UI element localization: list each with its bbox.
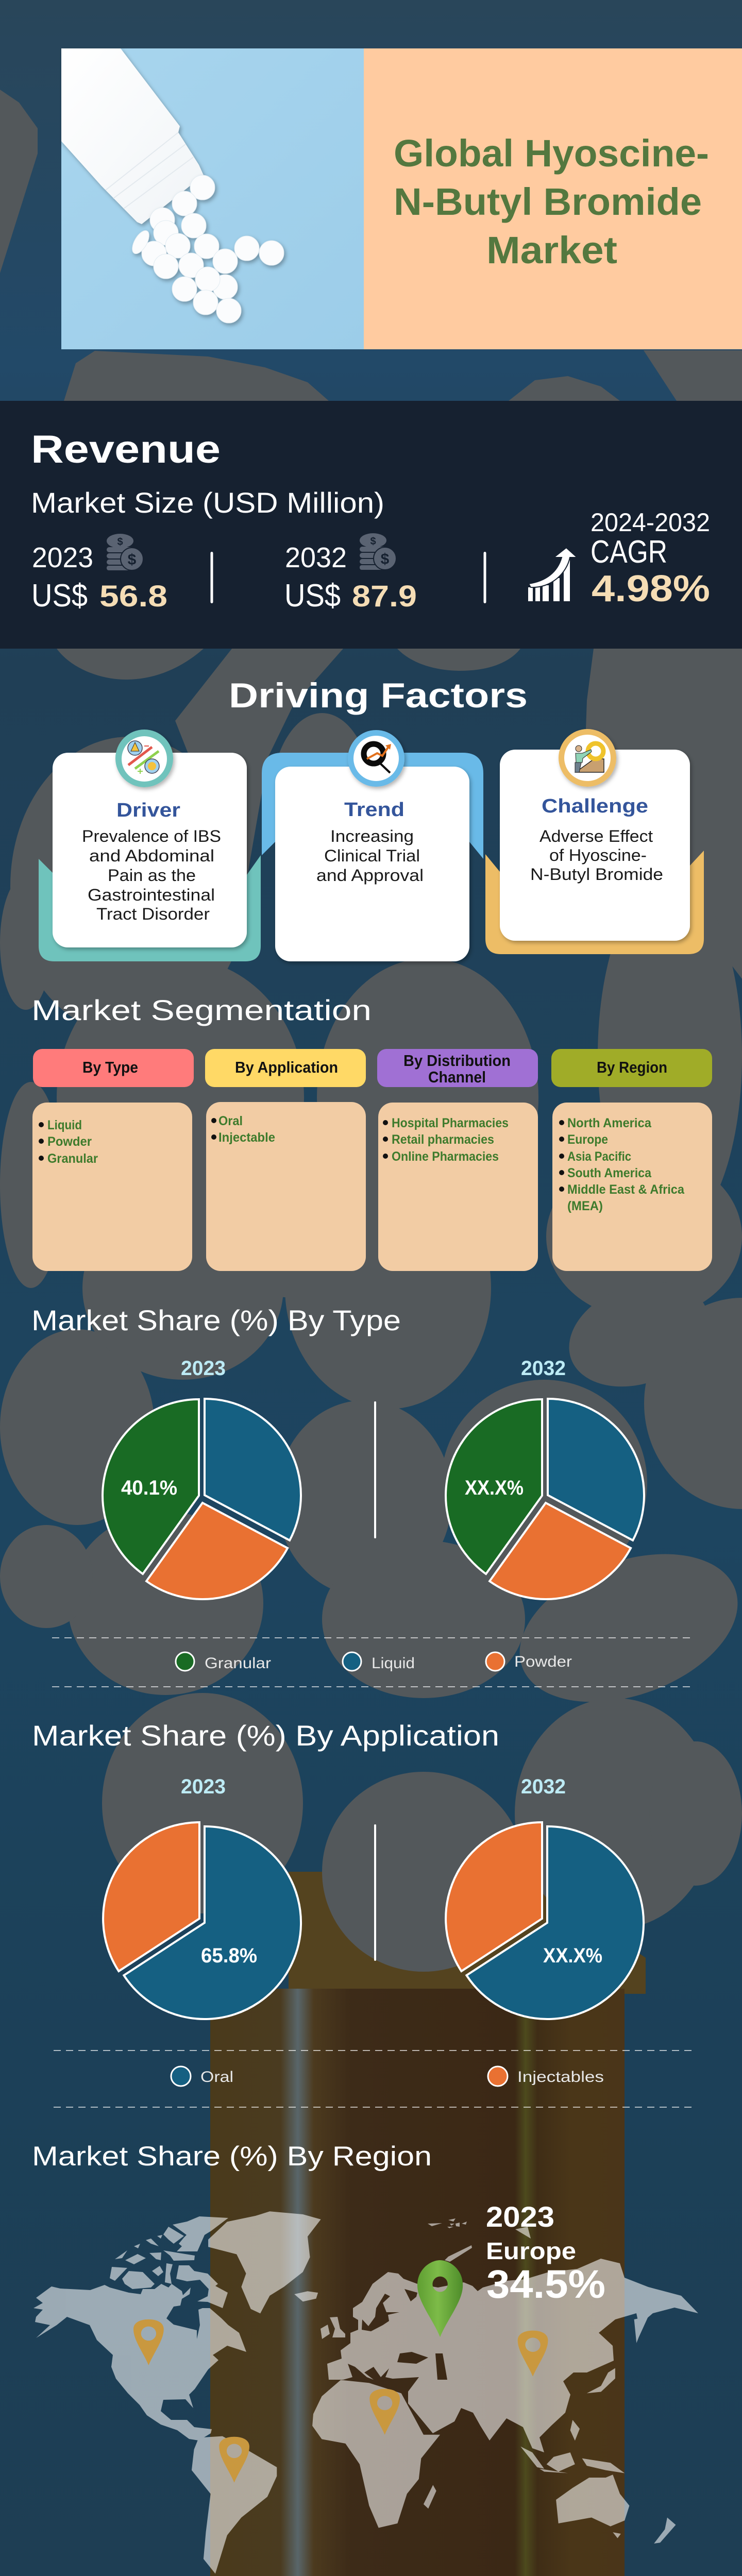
panel: by type bbox=[32, 1049, 194, 1271]
list: region: Europe bbox=[567, 1132, 608, 1147]
challenge heading: Challenge bbox=[542, 795, 648, 817]
icon: coins 2023: $ bbox=[117, 536, 123, 548]
label: 2023: 2023 bbox=[181, 1357, 226, 1380]
great britain and ireland bbox=[321, 2317, 345, 2339]
trend text: Clinical Trial bbox=[324, 846, 420, 865]
value: granular 2023: 40.1% bbox=[121, 1477, 177, 1499]
driver text: Gastrointestinal bbox=[88, 886, 215, 904]
list: type: Powder bbox=[47, 1134, 92, 1149]
pin: north america bbox=[133, 2319, 164, 2365]
legend: type bbox=[176, 1652, 572, 1672]
oceania bbox=[556, 2475, 676, 2544]
pie chart: application 2032 bbox=[446, 1822, 644, 2019]
callout: europe share bbox=[486, 2200, 605, 2307]
driver text: Pain as the bbox=[108, 866, 196, 885]
title panel bbox=[364, 48, 742, 349]
icon: coins 2023: $ bbox=[128, 551, 137, 568]
stat: 2023 revenue: 2023 bbox=[32, 541, 93, 573]
pill bottle bbox=[61, 48, 204, 224]
callout: europe share: 34.5% bbox=[486, 2262, 605, 2307]
stat: 2032 revenue: US$ bbox=[284, 578, 341, 614]
eurasia bbox=[327, 2259, 698, 2452]
map land bbox=[33, 2211, 698, 2574]
icon: driver bbox=[115, 730, 173, 787]
panel: by distribution channel bbox=[377, 1049, 538, 1271]
header: by distribution channel: Channel bbox=[428, 1068, 486, 1086]
list: type: Liquid bbox=[47, 1118, 82, 1132]
header: by application bbox=[205, 1049, 366, 1087]
title bbox=[394, 132, 709, 272]
list: distribution channel: Hospital Pharmacies bbox=[392, 1116, 509, 1130]
label: 2032: 2032 bbox=[521, 1357, 566, 1380]
value: granular 2032: XX.X% bbox=[465, 1477, 524, 1499]
heading: driving factors: Driving Factors bbox=[229, 676, 528, 715]
trend text: Increasing bbox=[330, 827, 414, 845]
southeast asian islands bbox=[520, 2420, 625, 2473]
stat: 2032 revenue bbox=[284, 541, 417, 614]
icon: trend bbox=[348, 730, 404, 787]
trend text: and Approval bbox=[316, 866, 424, 885]
trend text bbox=[316, 827, 424, 885]
legend: type: Liquid bbox=[372, 1655, 415, 1672]
challenge text bbox=[530, 827, 663, 884]
label: 2023: 2023 bbox=[181, 1775, 226, 1798]
list: region: South America bbox=[567, 1166, 652, 1180]
value: oral 2023: 65.8% bbox=[201, 1944, 257, 1967]
stat: CAGR: 4.98% bbox=[592, 568, 710, 609]
panel: driver bbox=[39, 730, 261, 961]
list: region bbox=[552, 1103, 712, 1271]
stat: CAGR: CAGR bbox=[591, 534, 667, 570]
legend: application bbox=[171, 2066, 604, 2086]
driver text: Prevalence of IBS bbox=[82, 827, 221, 845]
stat: 2032 revenue: 2032 bbox=[285, 541, 347, 573]
driver heading: Driver bbox=[116, 800, 180, 821]
list: application: Injectable bbox=[218, 1130, 275, 1145]
list: application: Oral bbox=[218, 1114, 243, 1128]
list: type: Granular bbox=[47, 1151, 98, 1166]
pie chart: type 2023 bbox=[103, 1399, 301, 1599]
driver text: and Abdominal bbox=[89, 846, 214, 865]
northern russian islands bbox=[428, 2218, 531, 2262]
driver text: Tract Disorder bbox=[96, 905, 210, 923]
list: region: Asia Pacific bbox=[567, 1149, 631, 1164]
title: Global Hyoscine- bbox=[394, 132, 709, 175]
heading: market share by type: Market Share (%) By Type bbox=[31, 1304, 401, 1336]
pin: asia pacific bbox=[518, 2331, 548, 2377]
divider bbox=[483, 552, 486, 603]
south america bbox=[192, 2436, 277, 2574]
background: amber pill bottle bbox=[210, 1872, 646, 2576]
list: type bbox=[32, 1103, 192, 1271]
header: by application: By Application bbox=[235, 1058, 338, 1076]
stat: CAGR: 2024-2032 bbox=[591, 508, 710, 537]
legend: application: Injectables bbox=[517, 2069, 604, 2086]
header: by region bbox=[551, 1049, 712, 1087]
title: Market bbox=[486, 229, 617, 272]
world map bbox=[33, 2211, 698, 2574]
background: pill shapes bbox=[0, 90, 742, 1972]
stat: 2023 revenue: US$ bbox=[31, 578, 88, 614]
arctic islands bbox=[110, 2216, 228, 2308]
legend: type: Granular bbox=[205, 1655, 271, 1672]
header: by region: By Region bbox=[597, 1058, 667, 1076]
header: by type: By Type bbox=[82, 1058, 138, 1076]
panel: revenue bbox=[0, 401, 742, 649]
list: region: North America bbox=[567, 1116, 652, 1130]
heading: market segmentation: Market Segmentation bbox=[31, 994, 372, 1026]
list: distribution channel: Online Pharmacies bbox=[392, 1149, 499, 1164]
icon: coins 2032 bbox=[360, 533, 396, 570]
value: oral 2032: XX.X% bbox=[543, 1944, 602, 1967]
pin: europe bbox=[417, 2260, 463, 2337]
pie chart: application 2023 bbox=[103, 1822, 301, 2019]
legend: application: Oral bbox=[200, 2069, 233, 2086]
divider bbox=[210, 552, 213, 603]
list: distribution channel bbox=[378, 1103, 538, 1271]
greenland and iceland bbox=[208, 2211, 321, 2313]
japan and kamchatka bbox=[587, 2316, 648, 2393]
driver text bbox=[82, 827, 221, 923]
north america bbox=[33, 2284, 246, 2441]
list: region: (MEA) bbox=[567, 1199, 603, 1213]
spilled tablets bbox=[129, 175, 284, 323]
vertical divider bbox=[374, 1401, 376, 1538]
heading: market share by region: Market Share (%) By Region bbox=[32, 2141, 432, 2172]
stat: 2023 revenue bbox=[31, 541, 167, 614]
callout: europe share: 2023 bbox=[486, 2200, 554, 2233]
list: distribution channel: Retail pharmacies bbox=[392, 1132, 494, 1147]
legend: type: Powder bbox=[514, 1653, 572, 1670]
challenge text: N-Butyl Bromide bbox=[530, 865, 663, 884]
icon: coins 2032: $ bbox=[381, 551, 390, 568]
stat: 2023 revenue: 56.8 bbox=[99, 580, 167, 613]
panel: by region bbox=[551, 1049, 712, 1271]
panel: trend bbox=[262, 730, 483, 961]
icon: challenge bbox=[559, 729, 616, 787]
panel: challenge bbox=[485, 729, 704, 954]
africa bbox=[312, 2380, 440, 2528]
pie chart: type 2032 bbox=[446, 1399, 644, 1599]
subheading: market size: Market Size (USD Million) bbox=[31, 486, 384, 519]
header: by distribution channel bbox=[377, 1049, 538, 1087]
challenge text: of Hyoscine- bbox=[549, 846, 647, 865]
icon: coins 2023 bbox=[107, 534, 143, 570]
heading: revenue: Revenue bbox=[31, 428, 221, 471]
icon: coins 2032: $ bbox=[370, 536, 376, 547]
list: application bbox=[206, 1102, 366, 1271]
challenge text: Adverse Effect bbox=[539, 827, 653, 845]
heading: market share by application: Market Share (%) By Application bbox=[32, 1719, 499, 1752]
title: N-Butyl Bromide bbox=[394, 180, 702, 223]
hero banner bbox=[61, 48, 742, 349]
list: region: Middle East & Africa bbox=[567, 1182, 685, 1197]
label: 2032: 2032 bbox=[521, 1775, 566, 1798]
header: by type bbox=[33, 1049, 194, 1087]
vertical divider bbox=[374, 1824, 376, 1961]
hero photo: bottle and pills bbox=[61, 48, 364, 349]
pin: middle east and africa bbox=[369, 2389, 400, 2435]
callout: europe share: Europe bbox=[486, 2238, 576, 2264]
panel: by application bbox=[205, 1049, 366, 1271]
trend heading: Trend bbox=[344, 799, 404, 821]
stat: 2032 revenue: 87.9 bbox=[352, 580, 417, 613]
stat: CAGR bbox=[591, 508, 710, 609]
header: by distribution channel: By Distribution bbox=[403, 1052, 511, 1070]
icon: growth arrow bbox=[528, 548, 577, 601]
pin: south america bbox=[219, 2437, 249, 2483]
